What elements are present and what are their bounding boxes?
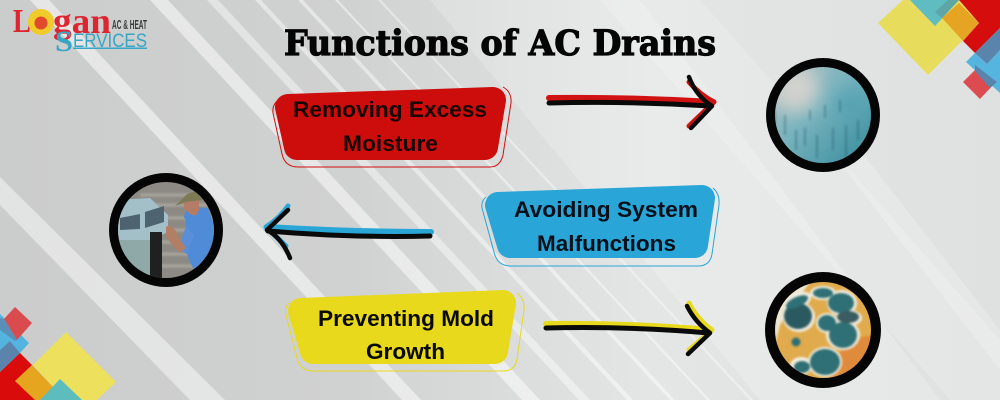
logo: Logan AC & Heat Services: S [55, 25, 73, 58]
panel: preventing mold growth: Preventing Mold [318, 306, 494, 331]
photo: mold in petri dish [765, 272, 881, 388]
panel: avoiding system malfunctions: Malfunctions [537, 231, 676, 256]
arrow: red right [549, 77, 714, 128]
arrow: yellow right [546, 303, 712, 354]
panel: removing excess moisture: Moisture [343, 131, 438, 156]
panel: preventing mold growth [285, 293, 524, 371]
decoration: bottom-left diamonds [0, 307, 116, 400]
panel: avoiding system malfunctions: Avoiding System [514, 197, 698, 222]
decoration: top-right diamonds [878, 0, 1000, 99]
logo: Logan AC & Heat Services: L [13, 3, 31, 40]
arrow: blue left [266, 206, 431, 258]
logo: Logan AC & Heat Services: gan [53, 1, 111, 41]
logo: Logan AC & Heat Services: AC & HEAT [112, 17, 147, 32]
panel: avoiding system malfunctions [482, 188, 719, 266]
title: Functions of AC Drains [284, 23, 716, 64]
logo: Logan AC & Heat Services [13, 1, 147, 58]
logo: Logan AC & Heat Services: ERVICES [73, 31, 147, 52]
panel: preventing mold growth: Growth [366, 339, 445, 364]
panel: removing excess moisture: Removing Excess [293, 97, 487, 122]
photo: technician servicing AC unit [109, 173, 223, 287]
photo: condensation on window [766, 58, 880, 172]
panel: removing excess moisture [273, 87, 511, 167]
